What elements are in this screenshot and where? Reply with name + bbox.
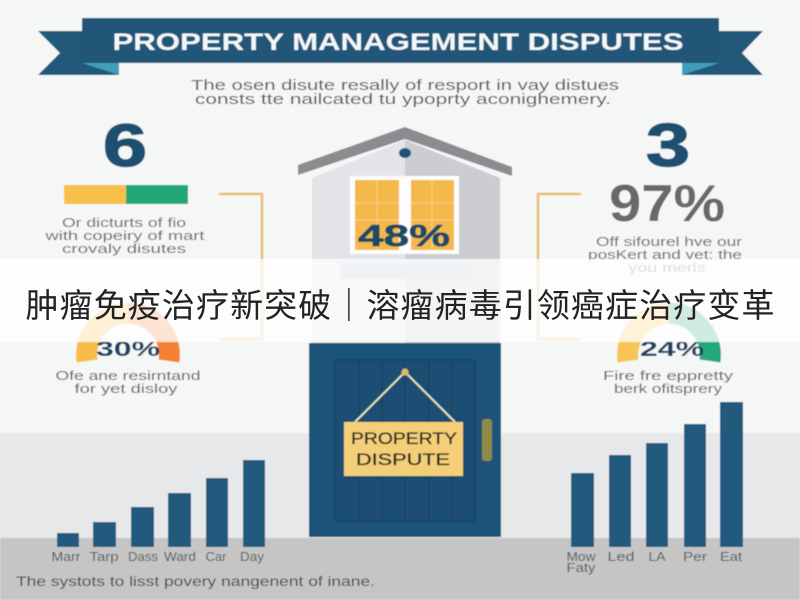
left gauge caption: for yet disloy: [74, 381, 178, 396]
sign: [344, 422, 463, 476]
house sill: [335, 260, 475, 279]
subtitle text: The osen disute resally of resport in vay distues: [191, 77, 619, 94]
left chart labels: Car: [206, 550, 226, 564]
house 48 percent: 48%: [358, 218, 450, 253]
right gauge caption: [603, 368, 734, 396]
right stat: caption: posKert and vet: the: [588, 247, 742, 262]
left stat: number 6: 6: [103, 112, 147, 179]
right chart labels: Faty: [566, 561, 596, 575]
left chart labels: Dass: [128, 550, 158, 564]
left stat: caption: [44, 215, 205, 256]
bottom caption: The systots to lisst povery nangenent of inane.: [16, 574, 375, 589]
left chart labels: Day: [240, 550, 265, 564]
left chart labels: [52, 550, 265, 564]
house: [298, 127, 512, 345]
right gauge caption: Fire fre eppretty: [603, 368, 734, 383]
left chart labels: Ward: [164, 550, 196, 564]
sign: DISPUTE: [356, 450, 450, 469]
right bar chart: [566, 402, 743, 575]
left bracket: [219, 194, 262, 339]
right bracket: [538, 194, 581, 339]
headline band background: [0, 259, 800, 342]
left gauge caption: [56, 368, 200, 396]
left stat: caption: Or dicturts of fio: [62, 215, 186, 230]
house vent dot: [399, 148, 411, 158]
right gauge value: 24%: [640, 338, 704, 361]
left stat: caption: with copeiry of mart: [44, 228, 205, 243]
title banner: [38, 18, 763, 75]
right stat: caption: Off sifourel hve our: [596, 234, 743, 249]
headline text: 肿瘤免疫治疗新突破｜溶瘤病毒引领癌症治疗变革: [26, 279, 774, 327]
left bar chart: [52, 460, 265, 564]
right gauge: [628, 313, 710, 361]
left gauge: [87, 313, 169, 361]
hook: [402, 368, 408, 376]
right gauge caption: berk ofitsprery: [614, 381, 723, 396]
right stat: caption: [588, 234, 743, 275]
hanging string: [355, 372, 455, 422]
left stat: two-colour bar: [64, 185, 188, 204]
right chart labels: Led: [608, 550, 635, 564]
sign: PROPERTY: [351, 429, 457, 448]
left chart labels: Tarp: [90, 550, 119, 564]
right stat: caption: you merls: [628, 260, 706, 275]
right chart labels: LA: [648, 550, 666, 564]
right chart labels: Eat: [720, 550, 743, 564]
right chart labels: Mow: [566, 550, 597, 564]
left stat: caption: crovaly disutes: [62, 241, 187, 256]
left gauge caption: Ofe ane resirntand: [56, 368, 200, 383]
right chart labels: [566, 550, 743, 575]
house window: [350, 176, 459, 254]
left gauge value: 30%: [96, 338, 160, 361]
door handle: [482, 419, 492, 461]
roof: [298, 127, 512, 176]
left chart labels: Marr: [52, 550, 80, 564]
right stat: 97 percent: 97%: [609, 175, 725, 233]
door: [309, 343, 501, 537]
right chart labels: Per: [683, 550, 707, 564]
right stat: number 3: 3: [646, 112, 690, 179]
subtitle text: consts tte nailcated tu ypoprty aconighemery.: [195, 91, 611, 108]
title: PROPERTY MANAGEMENT DISPUTES: [112, 29, 684, 56]
subtitle text: [191, 77, 619, 108]
